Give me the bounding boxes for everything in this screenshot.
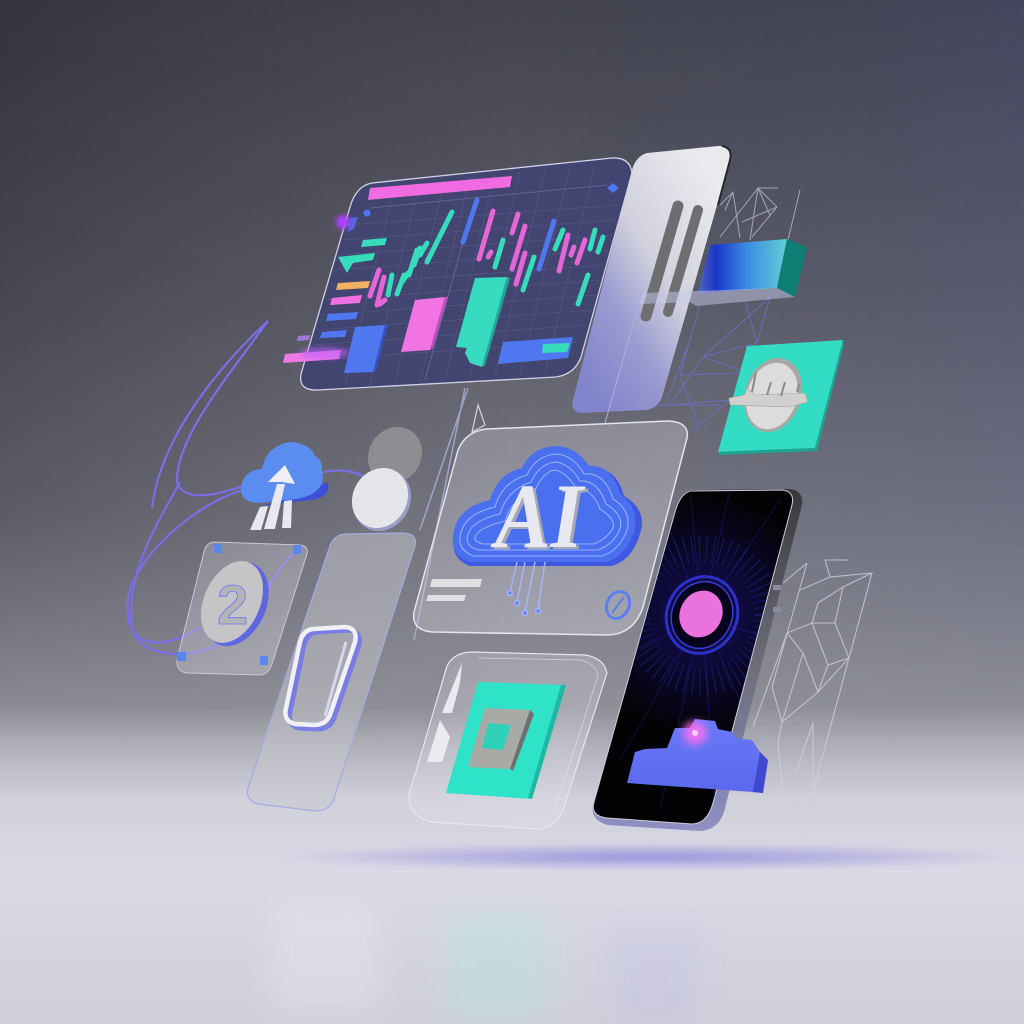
label AI: AI bbox=[490, 465, 586, 567]
phone cloud bbox=[627, 719, 768, 793]
legend bars bbox=[283, 238, 387, 363]
glow accent left bbox=[300, 347, 350, 359]
icon: upload cloud bbox=[241, 442, 328, 530]
blocks bbox=[344, 277, 573, 373]
ring icon bbox=[285, 627, 360, 729]
phone buttons bbox=[773, 585, 781, 612]
floor shadow bbox=[270, 843, 1024, 871]
panel: chart dashboard bbox=[283, 158, 632, 390]
panel: AI cloud glass bbox=[414, 421, 687, 635]
phone bbox=[593, 489, 802, 831]
teal-blue cube bbox=[605, 239, 807, 423]
cloud chip icon bbox=[729, 350, 811, 440]
wireframe mesh top right bbox=[720, 188, 800, 240]
flowing purple lines bbox=[127, 321, 367, 654]
radial lines bbox=[620, 490, 780, 810]
candlestick series bbox=[370, 200, 603, 305]
chip teal tile bbox=[446, 682, 566, 799]
toggle circles bbox=[341, 416, 433, 542]
glow accent bbox=[336, 215, 358, 232]
label AI: AI bbox=[493, 467, 589, 569]
slider tracks bbox=[646, 206, 698, 316]
panel: numeric glass tile bbox=[177, 542, 307, 675]
cloud bbox=[453, 448, 642, 566]
floor reflections bbox=[270, 900, 700, 1020]
panel: tall glass card bbox=[247, 533, 415, 811]
planet bbox=[671, 583, 731, 645]
wireframe mesh right bbox=[753, 560, 872, 837]
icon glyph: 2 bbox=[217, 573, 248, 636]
small triangle marker bbox=[472, 405, 485, 432]
violet mesh behind tall panel bbox=[650, 297, 770, 432]
circuit legs bbox=[508, 562, 545, 616]
side marks bbox=[427, 663, 462, 762]
corner clips bbox=[177, 544, 301, 665]
panel: chip glass bbox=[409, 652, 607, 829]
teal card with cloud bbox=[718, 340, 844, 455]
chart title bar bbox=[368, 176, 512, 200]
panel: tall frosted glass bbox=[572, 146, 731, 413]
chart status dots bbox=[364, 183, 619, 216]
chip frame bbox=[468, 708, 530, 769]
text lines bbox=[426, 579, 482, 601]
refresh icon bbox=[602, 588, 634, 622]
stand line bbox=[414, 388, 468, 640]
chart grid bbox=[310, 165, 620, 385]
